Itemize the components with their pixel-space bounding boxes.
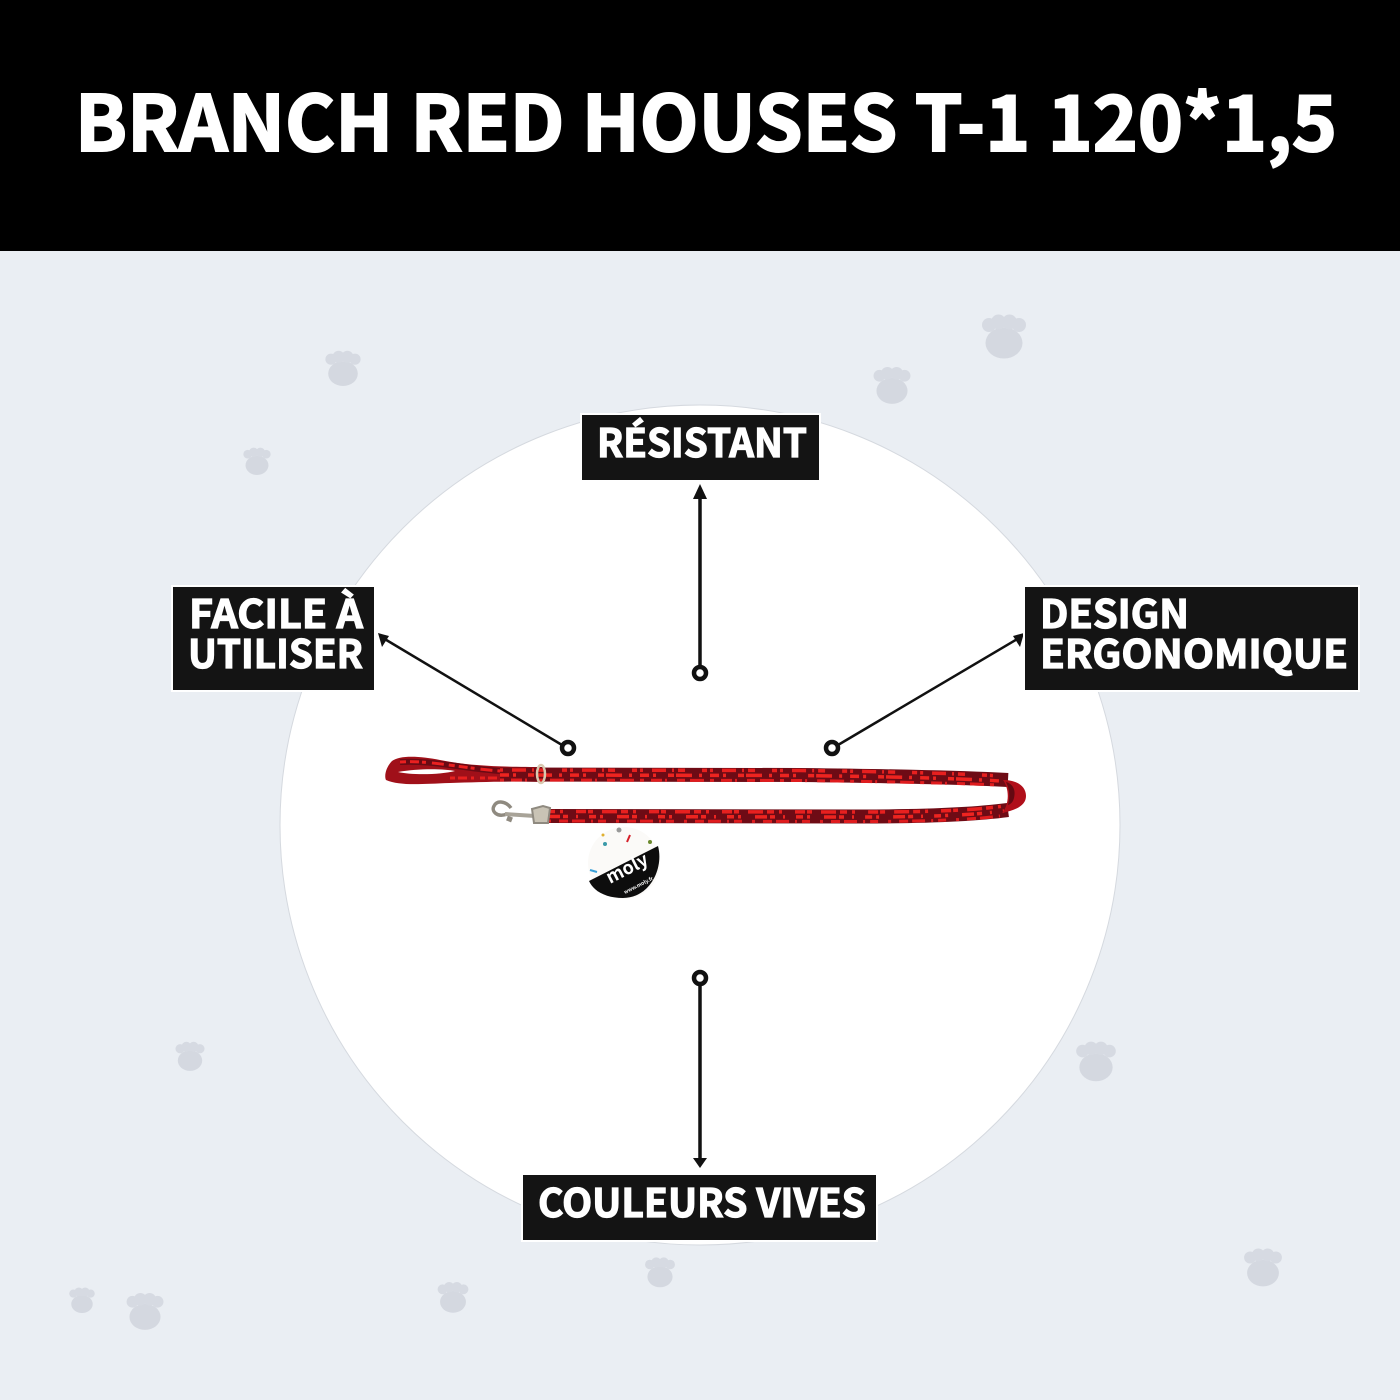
label: couleurs vives: COULEURS VIVES <box>538 1173 866 1229</box>
tag logo: moly <box>601 846 653 889</box>
white circle panel <box>280 405 1120 1245</box>
title: BRANCH RED HOUSES T-1 120*1,5 <box>75 63 1337 174</box>
label: design ergonomique: ERGONOMIQUE <box>1040 624 1348 680</box>
label: facile a utiliser: UTILISER <box>188 624 363 680</box>
paw print pattern <box>69 314 1282 1330</box>
arrow: design ergonomique <box>826 633 1024 754</box>
metal snap hook <box>493 802 550 823</box>
product: red leash <box>385 757 1026 899</box>
leash bottom strand <box>548 810 1008 816</box>
label: facile a utiliser: FACILE À <box>189 584 364 640</box>
product tag: www.moly.fr <box>623 875 655 896</box>
arrow: resistant <box>693 484 707 679</box>
header band <box>0 0 1400 251</box>
label: resistant: RÉSISTANT <box>597 413 807 469</box>
arrow: couleurs vives <box>693 972 707 1168</box>
arrow: facile a utiliser <box>378 633 574 754</box>
ring <box>537 765 545 783</box>
product tag <box>588 827 660 899</box>
label: facile a utiliser <box>172 584 375 691</box>
leash handle loop <box>385 757 545 784</box>
label: design ergonomique <box>1024 584 1359 691</box>
label: design ergonomique: DESIGN <box>1040 584 1189 640</box>
leash right bend <box>1002 780 1026 813</box>
leash top strand <box>500 774 1008 780</box>
